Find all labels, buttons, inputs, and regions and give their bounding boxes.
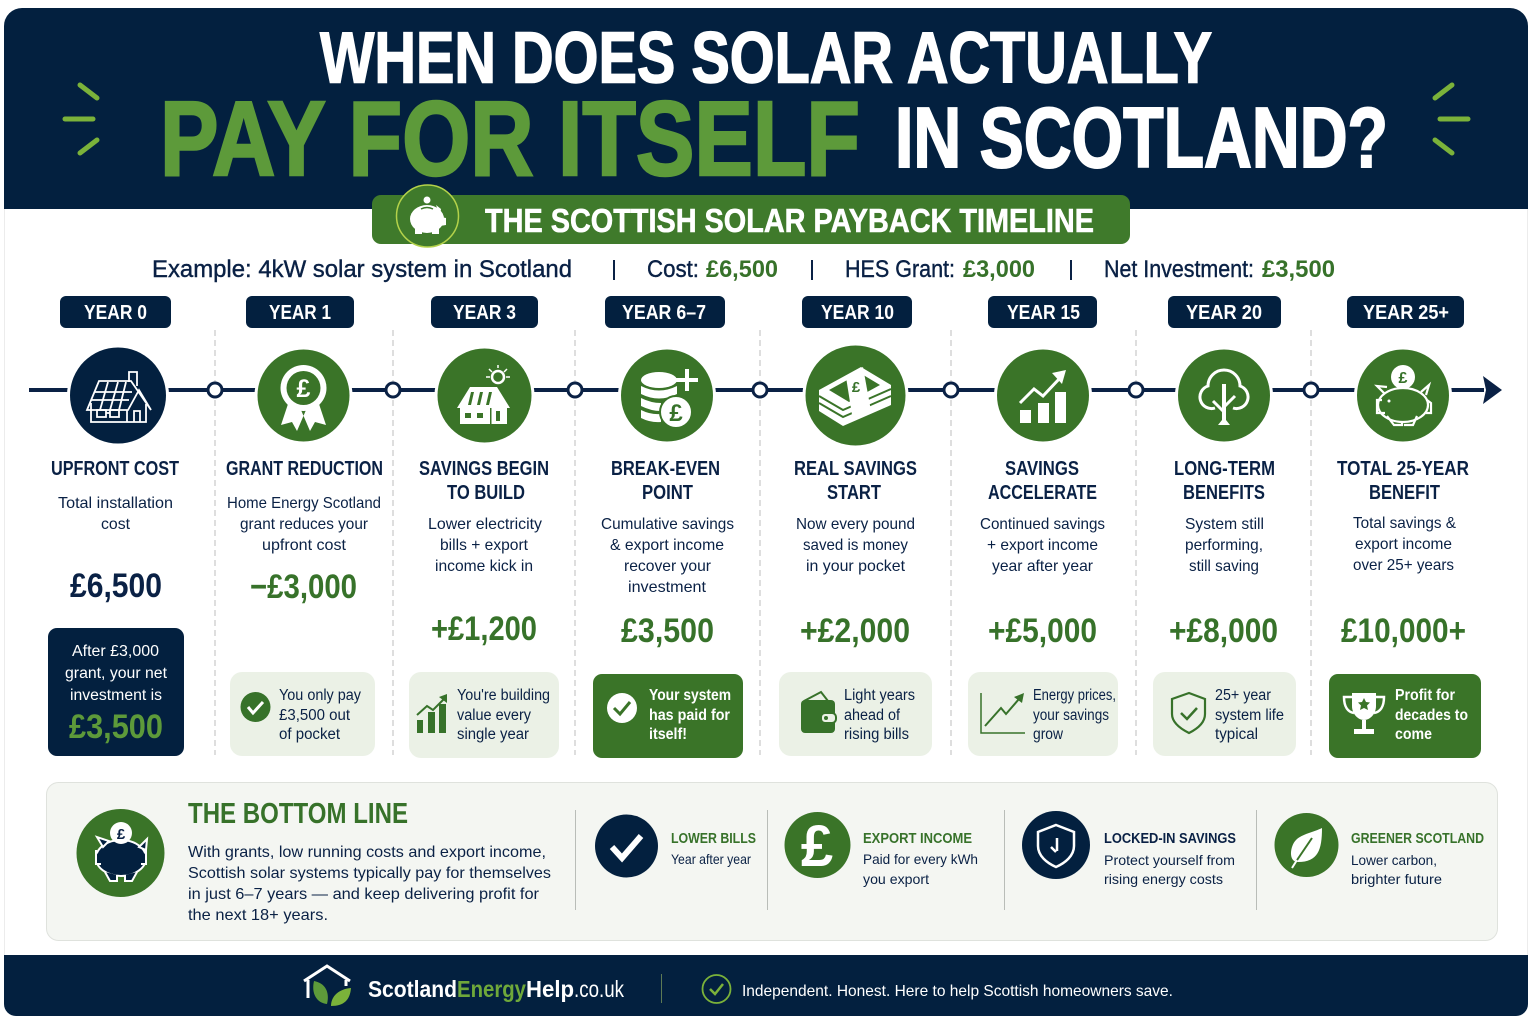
value: −£3,000 (250, 568, 357, 606)
heading: ACCELERATE (988, 482, 1097, 504)
year badge: YEAR 6–7 (622, 301, 706, 324)
heading (1174, 458, 1275, 504)
callout: system life (1153, 672, 1296, 756)
value: £3,500 (621, 612, 714, 650)
benefit: export income: you export (863, 871, 929, 887)
heading: BENEFITS (1183, 482, 1265, 504)
value: +£5,000 (988, 612, 1097, 650)
benefit: greener scotland (1274, 813, 1484, 887)
heading: START (827, 482, 881, 504)
description: year after year (992, 558, 1094, 575)
example facts row: Example: 4kW solar system in Scotland (152, 256, 572, 283)
icon: rising bar chart (994, 346, 1092, 444)
heading: BENEFIT (1369, 482, 1440, 504)
description: Lower electricity (428, 516, 542, 533)
heading: THE BOTTOM LINE (188, 798, 408, 830)
callout: out of pocket: You only pay (279, 687, 361, 704)
callout: ahead of rising bills: Light years (844, 687, 915, 704)
callout: profit for decades: decades to (1395, 707, 1468, 724)
heading (794, 458, 917, 504)
description: recover your (624, 558, 712, 575)
heading: BREAK-EVEN (611, 458, 720, 480)
description: Total installation (58, 495, 173, 512)
right sun rays (1435, 85, 1468, 153)
description: income kick in (435, 558, 533, 575)
title highlight: PAY FOR ITSELF (160, 80, 860, 198)
description: over 25+ years (1353, 557, 1454, 574)
timeline axis with arrow (29, 376, 1502, 404)
footer band (4, 955, 1528, 1016)
site name: Help (526, 976, 574, 1002)
callout: out of pocket (230, 672, 375, 756)
description: cost (101, 516, 131, 533)
description: Total savings & (1353, 515, 1456, 532)
site name (368, 976, 624, 1002)
summary paragraph: Scottish solar systems typically pay for themselves (188, 865, 551, 882)
callout: out of pocket: £3,500 out (279, 707, 351, 724)
panel: the bottom line (46, 782, 1498, 940)
description: investment (628, 579, 707, 596)
benefit: locked-in savings: rising energy costs (1104, 871, 1223, 887)
year badge (1347, 296, 1464, 328)
description: export income (1355, 536, 1452, 553)
banner heading: THE SCOTTISH SOLAR PAYBACK TIMELINE (485, 202, 1094, 239)
year badge (60, 296, 171, 328)
site name: Energy (457, 976, 526, 1002)
example facts row: £3,000 (963, 256, 1035, 283)
heading: SAVINGS (1005, 458, 1079, 480)
icon: tree (1175, 346, 1273, 444)
column: year 1 (226, 296, 383, 756)
description (796, 516, 915, 575)
year badge (605, 296, 725, 328)
example facts row: £3,500 (1262, 256, 1335, 283)
tagline: Independent. Honest. Here to help Scottish homeowners save. (742, 983, 1173, 1000)
description: upfront cost (262, 537, 347, 554)
year badge: YEAR 3 (453, 301, 516, 324)
description: still saving (1189, 558, 1259, 575)
icon: coins with pound and plus: £ (669, 400, 683, 427)
header band (4, 8, 1528, 209)
example facts row: HES Grant: (845, 256, 955, 283)
description (1185, 516, 1264, 575)
description: & export income (610, 537, 724, 554)
benefit: locked-in savings (1022, 811, 1236, 887)
callout: energy prices (968, 672, 1118, 756)
description: bills + export (440, 537, 529, 554)
description: Cumulative savings (601, 516, 734, 533)
example facts row: £6,500 (706, 256, 778, 283)
year badge (246, 296, 354, 328)
benefit: export income: £ (801, 814, 833, 879)
title line 1: WHEN DOES SOLAR ACTUALLY (320, 18, 1212, 98)
summary paragraph (188, 844, 551, 924)
callout: net investment: After £3,000 (72, 643, 159, 660)
callout: out of pocket: of pocket (279, 726, 341, 743)
benefit: export income (784, 812, 978, 887)
callout: system life: typical (1215, 726, 1258, 743)
value: +£2,000 (800, 612, 910, 650)
benefit: lower bills: Year after year (671, 851, 751, 867)
icon: sunny house (434, 346, 534, 446)
heading: TO BUILD (447, 482, 525, 504)
callout: net investment: £3,500 (69, 708, 163, 746)
icon: piggy bank in green circle (76, 809, 164, 897)
value: £6,500 (70, 567, 162, 605)
column: year 3 (409, 296, 559, 758)
column: year 6-7 (593, 296, 743, 758)
description: Now every pound (796, 516, 915, 533)
column: year 25+ (1329, 296, 1481, 758)
logo: house with leaves (304, 966, 351, 1006)
benefit: locked-in savings: LOCKED-IN SAVINGS (1104, 831, 1236, 847)
callout: system life: system life (1215, 707, 1284, 724)
year badge (802, 296, 912, 328)
callout: system life: 25+ year (1215, 687, 1271, 704)
description: Home Energy Scotland (227, 495, 381, 512)
callout: net investment: grant, your net (65, 665, 168, 682)
benefit: export income: EXPORT INCOME (863, 831, 972, 847)
heading: LONG-TERM (1174, 458, 1275, 480)
benefit: greener scotland: GREENER SCOTLAND (1351, 831, 1484, 847)
icon: house with solar panels (67, 344, 169, 446)
year badge: YEAR 20 (1186, 301, 1262, 324)
description (601, 516, 734, 596)
subtitle banner (372, 185, 1130, 247)
benefit: locked-in savings: Protect yourself from (1104, 852, 1235, 868)
description: performing, (1185, 537, 1263, 554)
left sun rays (65, 85, 97, 153)
heading: SAVINGS BEGIN (419, 458, 549, 480)
heading (988, 458, 1097, 504)
year badge (1168, 296, 1281, 328)
site name: Scotland (368, 976, 457, 1002)
column: year 0 (48, 296, 184, 756)
description: grant reduces your (240, 516, 369, 533)
benefit: lower bills (595, 814, 756, 878)
description (1353, 515, 1456, 574)
icon: stack of banknotes: £ (852, 379, 861, 396)
callout: energy prices: Energy prices, (1033, 687, 1116, 704)
heading: TOTAL 25-YEAR (1337, 458, 1469, 480)
icon: coins with pound and plus (618, 346, 716, 444)
icon: stack of banknotes (802, 342, 908, 448)
benefit: export income: Paid for every kWh (863, 851, 978, 867)
year badge (431, 296, 538, 328)
site name: .co.uk (574, 976, 624, 1002)
icon: check in circle (702, 975, 730, 1003)
callout: energy prices: your savings (1033, 707, 1109, 724)
year badge: YEAR 0 (84, 301, 147, 324)
summary paragraph: in just 6–7 years — and keep delivering profit for (188, 886, 540, 903)
heading (611, 458, 720, 504)
callout: system paid for itself: itself! (649, 726, 687, 743)
description (58, 495, 173, 533)
callout: building value: You're building (457, 687, 550, 704)
example facts row: Net Investment: (1104, 256, 1254, 283)
icon: pound rosette (254, 346, 352, 444)
value: £10,000+ (1341, 612, 1466, 650)
callout: system paid for itself: Your system (649, 687, 731, 704)
year badge: YEAR 25+ (1363, 301, 1449, 324)
heading: REAL SAVINGS (794, 458, 917, 480)
heading (419, 458, 549, 504)
callout: net investment: investment is (70, 687, 162, 704)
callout: system paid for itself: has paid for (649, 707, 730, 724)
callout: ahead of rising bills (779, 672, 932, 756)
example facts row (152, 256, 1335, 283)
callout: net investment (48, 628, 184, 756)
heading: UPFRONT COST (51, 458, 179, 480)
description: Continued savings (980, 516, 1105, 533)
icon: piggy bank with coin (396, 185, 458, 247)
column: year 20 (1153, 296, 1296, 756)
benefit: lower bills: LOWER BILLS (671, 831, 756, 847)
year badge (988, 296, 1097, 328)
heading: POINT (642, 482, 693, 504)
callout: profit for decades: Profit for (1395, 687, 1455, 704)
heading: GRANT REDUCTION (226, 458, 383, 480)
callout: building value: single year (457, 726, 529, 743)
value: +£8,000 (1169, 612, 1278, 650)
description: in your pocket (806, 558, 906, 575)
callout: energy prices: grow (1033, 726, 1064, 743)
callout: building value: value every (457, 707, 531, 724)
description (428, 516, 542, 575)
summary paragraph: the next 18+ years. (188, 907, 328, 924)
year badge: YEAR 10 (821, 301, 894, 324)
icon: piggy bank in green circle: £ (117, 826, 126, 843)
example facts row: Cost: (647, 256, 699, 283)
column: year 10 (779, 296, 932, 756)
year badge: YEAR 1 (269, 301, 331, 324)
benefit: greener scotland: brighter future (1351, 871, 1442, 887)
icon: piggy bank and pound coin: £ (1399, 370, 1408, 387)
title line 2 end: IN SCOTLAND? (895, 91, 1388, 186)
column: year 15 (968, 296, 1118, 756)
benefit: greener scotland: Lower carbon, (1351, 852, 1437, 868)
callout: profit for decades: come (1395, 726, 1432, 743)
description (980, 516, 1105, 575)
year badge: YEAR 15 (1007, 301, 1080, 324)
heading (1337, 458, 1469, 504)
callout: building value (409, 672, 559, 758)
description: + export income (987, 537, 1098, 554)
callout: system paid for itself (593, 674, 743, 758)
value: +£1,200 (431, 610, 537, 648)
icon: pound rosette: £ (297, 375, 311, 403)
description (227, 495, 381, 554)
callout: profit for decades (1329, 674, 1481, 758)
callout: ahead of rising bills: rising bills (844, 726, 909, 743)
callout: ahead of rising bills: ahead of (844, 707, 901, 724)
icon: piggy bank and pound coin (1354, 346, 1452, 444)
description: saved is money (803, 537, 908, 554)
description: System still (1185, 516, 1264, 533)
summary paragraph: With grants, low running costs and export income, (188, 844, 546, 861)
